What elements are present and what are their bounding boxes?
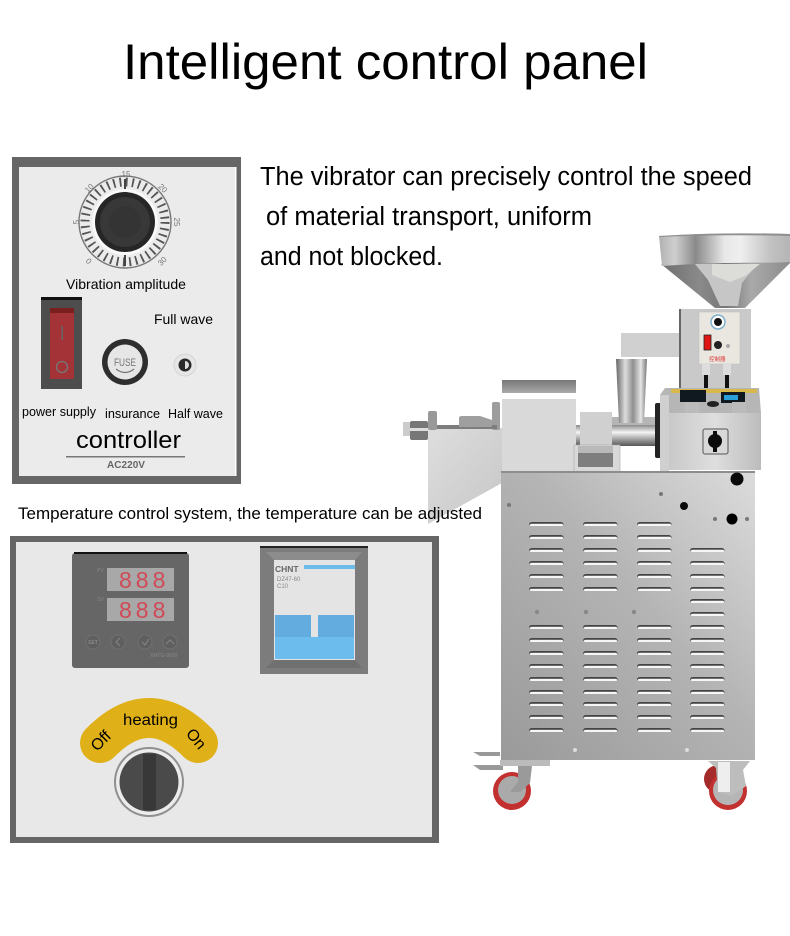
label: controller: controller (76, 427, 181, 454)
louvre vents (529, 522, 725, 732)
heating label arc (88, 712, 209, 755)
panel: temperature control (10, 536, 439, 843)
circuit breaker: CHNT (275, 564, 299, 574)
label: vibration amplitude: Vibration amplitude (66, 276, 186, 292)
machine illustration (403, 233, 790, 810)
heating selector knob (114, 747, 184, 817)
label: AC220V: AC220V (107, 460, 145, 471)
circuit breaker: C10 (277, 584, 289, 590)
chute (621, 333, 679, 357)
dial scale: 20 (156, 182, 169, 195)
caption: temperature control: Temperature control system, the temperature can be adjusted (18, 505, 482, 523)
temperature controller (72, 552, 189, 668)
dial scale: 25 (172, 218, 181, 227)
fuse holder (102, 339, 148, 385)
text block: vibrator description: of material transport, uniform (266, 203, 592, 231)
press block (502, 380, 576, 473)
text block: vibrator description (260, 163, 752, 271)
label: half wave: Half wave (168, 406, 223, 421)
dial knob (92, 189, 158, 255)
control box: 控制器 (709, 355, 726, 363)
temperature controller: 888 (119, 597, 169, 623)
barrel and bracket (574, 403, 663, 472)
feed funnel tube (616, 359, 647, 423)
left feed box (403, 402, 502, 524)
lower control cabinet (660, 388, 761, 471)
right caster wheels (704, 761, 750, 810)
text block: vibrator description: The vibrator can precisely control the speed (260, 163, 752, 191)
panel: vibration controller (12, 157, 241, 484)
circuit breaker (260, 546, 368, 674)
label: insurance: insurance (105, 406, 160, 421)
dial scale: 0 (84, 257, 94, 266)
temperature controller: SET (88, 640, 98, 646)
left caster wheel (473, 752, 550, 810)
power rocker switch (41, 297, 82, 389)
temperature controller: 888 (119, 567, 169, 593)
fuse holder: FUSE (114, 357, 136, 369)
control box (679, 309, 751, 389)
temperature controller: SV (97, 597, 104, 603)
heating label arc: heating (123, 712, 178, 729)
circuit breaker: DZ47-60 (277, 577, 301, 583)
temperature controller: XMTG-9000 (150, 653, 177, 659)
heating label arc: On (182, 726, 209, 753)
dial scale: 15 (122, 170, 131, 179)
title: Intelligent control panel (123, 34, 648, 90)
label: full wave: Full wave (154, 311, 213, 327)
text block: vibrator description: and not blocked. (260, 243, 443, 271)
temperature controller: PV (97, 568, 104, 574)
label: power supply: power supply (22, 404, 96, 419)
dial scale: 30 (156, 255, 169, 268)
main cabinet (501, 471, 755, 760)
wave toggle (174, 354, 196, 376)
hopper (659, 233, 790, 308)
dial scale: 5 (72, 219, 81, 224)
heating label arc: Off (88, 728, 115, 755)
dial scale (72, 170, 181, 268)
dial scale: 10 (83, 182, 96, 195)
